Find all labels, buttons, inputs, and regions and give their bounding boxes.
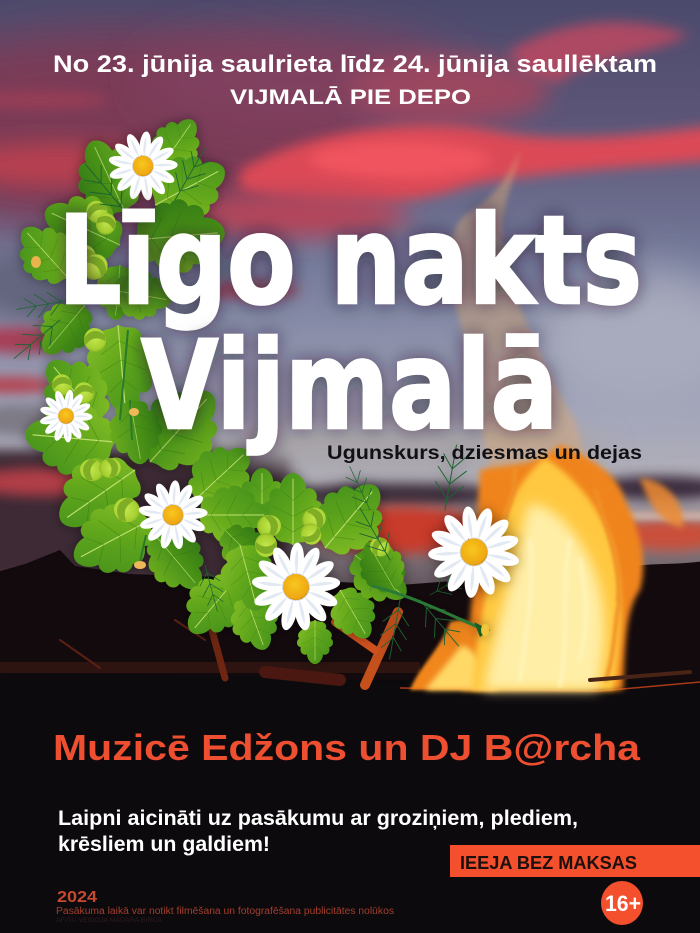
age badge 16+: 16+ <box>605 891 641 916</box>
free entry banner <box>450 845 700 877</box>
daisy 3 <box>136 478 210 552</box>
free entry banner: IEEJA BEZ MAKSAS <box>460 853 637 873</box>
acorns <box>50 197 394 560</box>
filming notice: Pasākuma laikā var notikt filmēšana un fotografēšana publicitātes nolūkos <box>56 906 394 917</box>
dill sprigs <box>6 142 478 661</box>
daisy 4 <box>250 541 342 633</box>
year: 2024 <box>57 889 97 906</box>
tree line and ground <box>0 550 700 933</box>
age badge 16+ <box>601 881 643 925</box>
daisy 1 <box>105 128 182 205</box>
background: sunset sky <box>0 0 700 600</box>
buds <box>31 256 490 637</box>
date line: No 23. jūnija saulrieta līdz 24. jūnija saullēktam <box>53 51 657 78</box>
invitation text: krēsliem un galdiem! <box>58 833 270 856</box>
music heading: Muzicē Edžons un DJ B@rcha <box>53 727 641 768</box>
venue line: VIJMALĀ PIE DEPO <box>230 86 471 109</box>
subtitle: Ugunskurs, dziesmas un dejas <box>327 443 642 464</box>
invitation text: Laipni aicināti uz pasākumu ar groziņiem, plediem, <box>58 807 578 830</box>
daisy 2 <box>35 385 97 447</box>
bonfire <box>60 445 690 690</box>
oak leaves <box>4 107 422 664</box>
daisy 5 <box>422 500 526 604</box>
title line 2: Vijmalā <box>141 315 558 457</box>
invitation text <box>58 807 578 856</box>
pale flame reflection <box>449 150 590 470</box>
poster credit: AFIŠU VEIDOJA MĀDARA BIRCA <box>56 915 163 924</box>
plant wreath <box>4 107 526 664</box>
